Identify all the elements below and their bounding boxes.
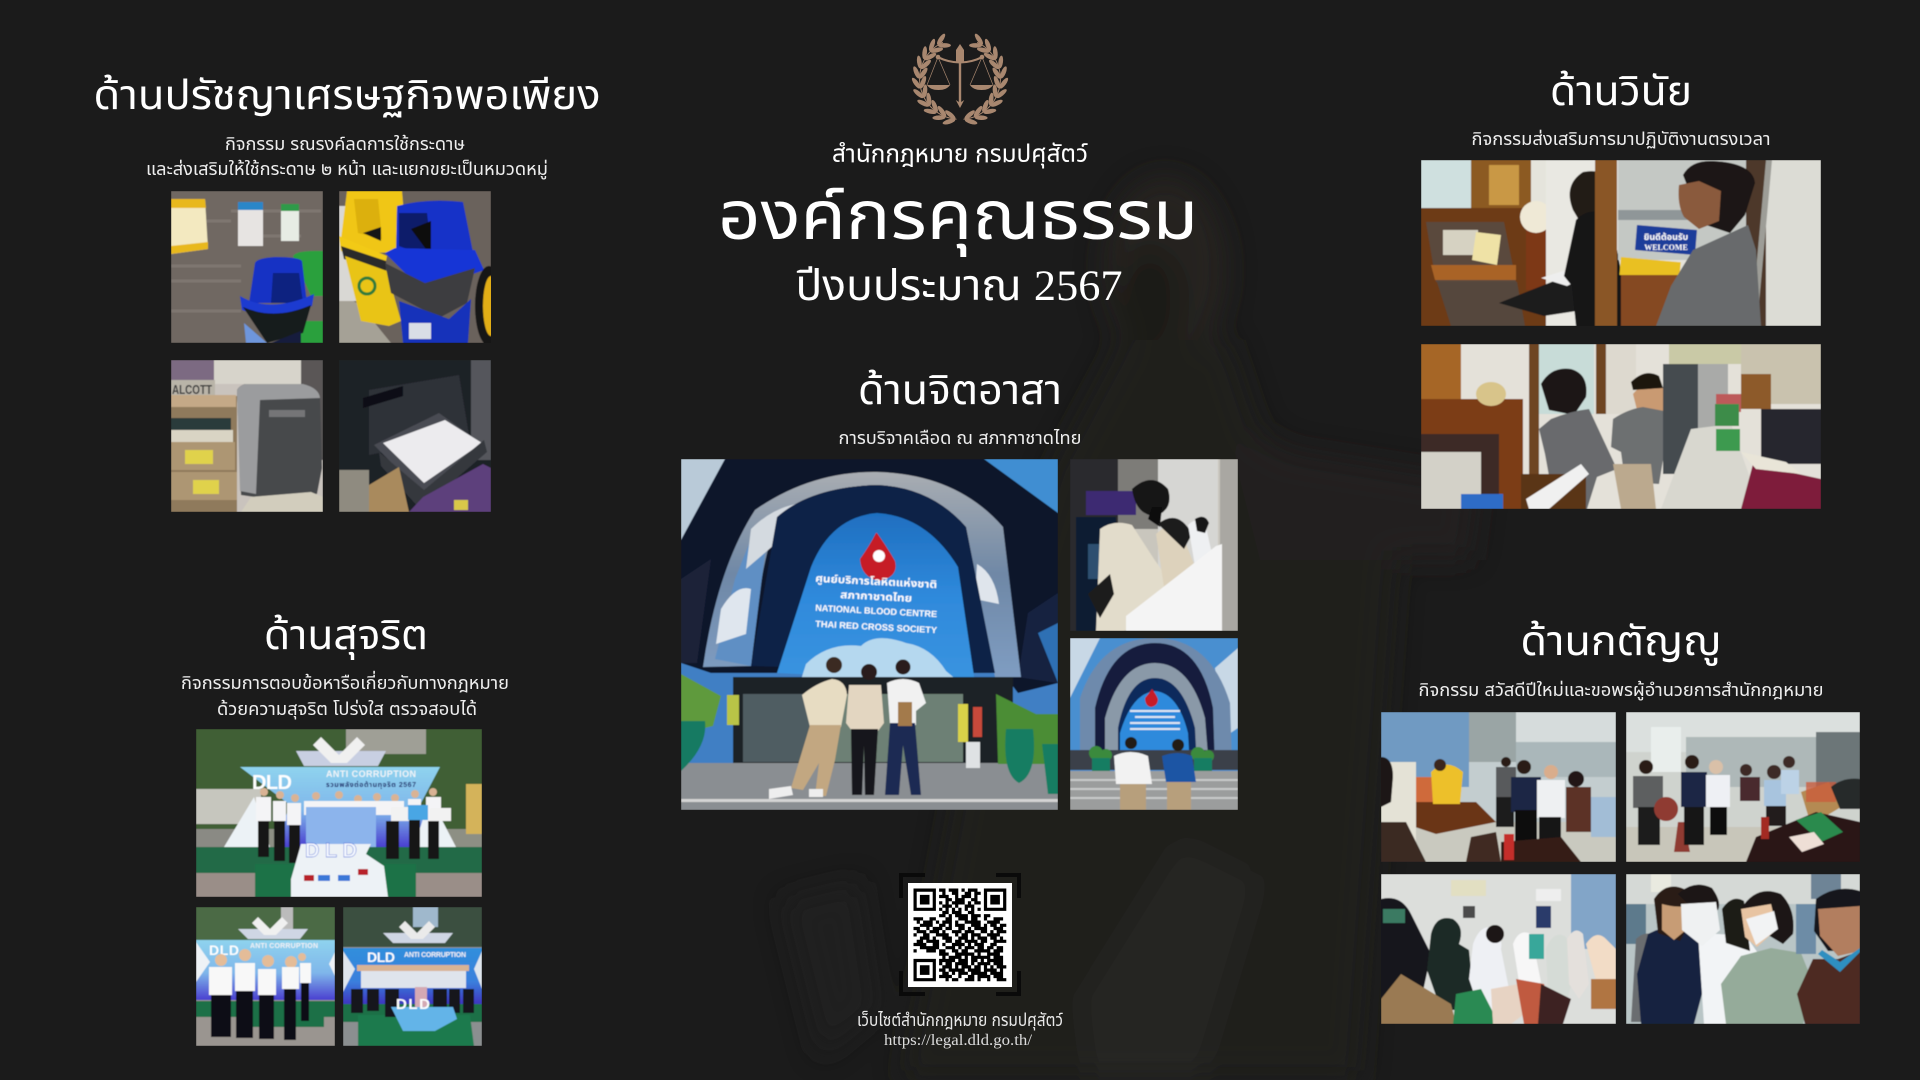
website url: https://legal.dld.go.th/ — [884, 1032, 1033, 1049]
photo: printer paper tray — [339, 360, 491, 512]
photo: staff close up — [1626, 874, 1860, 1024]
heading: gratitude: ด้านกตัญญู — [1520, 618, 1722, 666]
photo: anti corruption group: DLD — [305, 840, 357, 862]
QR corner brackets — [901, 875, 1019, 994]
photo: blood centre group — [1070, 638, 1238, 810]
photo: executives with crossed arms — [196, 907, 335, 1046]
photo: group on blue backdrop: ANTI CORRUPTION — [404, 952, 466, 959]
photo: blue recycling bin on stone wall — [171, 191, 323, 343]
photo: signing donation forms — [1070, 459, 1238, 631]
subheading: blood donation: การบริจาคเลือด ณ สภากาชาดไทย — [838, 428, 1082, 448]
heading: sufficiency economy: ด้านปรัชญาเศรษฐกิจพอเพียง — [94, 72, 600, 118]
building signage — [815, 572, 938, 635]
photo: anti corruption group: DLD — [252, 772, 292, 794]
photo: national blood centre — [681, 459, 1058, 810]
heading: volunteer: ด้านจิตอาสา — [858, 367, 1062, 413]
header subtitle: สำนักกฎหมาย กรมปศุสัตว์ — [832, 140, 1088, 169]
heading: discipline: ด้านวินัย — [1550, 68, 1692, 114]
photo: staff gathered in office — [1381, 874, 1616, 1024]
background statue of lady justice — [780, 175, 1480, 1080]
people — [769, 657, 926, 799]
description: honesty: ด้วยความสุจริต โปร่งใส ตรวจสอบได้ — [217, 699, 477, 720]
wreath left branch — [910, 32, 958, 128]
fiscal year line: ปีงบประมาณ 2567 — [796, 262, 1122, 310]
description: gratitude: กิจกรรม สวัสดีปีใหม่และขอพรผู้อำนวยการสำนักกฎหมาย — [1418, 680, 1824, 702]
website label: เว็บไซต์สำนักกฎหมาย กรมปศุสัตว์ — [857, 1010, 1063, 1031]
description: sufficiency economy: กิจกรรม รณรงค์ลดการใช้กระดาษ — [225, 134, 465, 154]
photo: yellow and blue bins — [339, 191, 491, 343]
photo: staff signing in: ยินดีต้อนรับ — [1644, 232, 1689, 242]
description: honesty — [181, 670, 509, 720]
photo: anti corruption group: รวมพลังต่อต้านทุจริต 2567 — [326, 781, 416, 790]
photo: group on blue backdrop: DLD — [396, 996, 430, 1013]
building signage: THAI RED CROSS SOCIETY — [815, 619, 937, 635]
building signage: NATIONAL BLOOD CENTRE — [815, 603, 937, 619]
photo: executives with crossed arms: ANTI CORRUPTION — [250, 943, 318, 950]
description: sufficiency economy: และส่งเสริมให้ใช้กระดาษ ๒ หน้า และแยกขยะเป็นหมวดหมู่ — [146, 159, 548, 181]
photo: executives with crossed arms: DLD — [209, 942, 239, 958]
photo: group on blue backdrop: DLD — [367, 949, 395, 965]
heading: honesty: ด้านสุจริต — [264, 612, 428, 660]
photo: anti corruption group — [196, 729, 482, 897]
photo: staff signing in — [1421, 160, 1821, 326]
photo: shredder and storage cart: ALCOTT — [172, 382, 212, 397]
main title: องค์กรคุณธรรม — [718, 178, 1198, 257]
photo: anti corruption group: ANTI CORRUPTION — [326, 769, 416, 779]
photo: group on blue backdrop — [343, 907, 482, 1046]
description: honesty: กิจกรรมการตอบข้อหารือเกี่ยวกับทางกฎหมาย — [181, 670, 509, 693]
building signage: ศูนย์บริการโลหิตแห่งชาติ — [815, 572, 938, 591]
photo: staff signing at cabinet — [1421, 344, 1821, 509]
building signage: สภากาชาดไทย — [840, 589, 912, 605]
emblem: scales and wreath — [910, 32, 1010, 128]
wreath right branch — [962, 32, 1010, 128]
photo: staff with hands pressed — [1626, 712, 1860, 862]
photo: staff signing in: WELCOME — [1644, 243, 1688, 252]
photo: shredder and storage cart — [171, 360, 323, 512]
description: sufficiency economy — [146, 134, 548, 181]
description: discipline: กิจกรรมส่งเสริมการมาปฏิบัติงานตรงเวลา — [1472, 129, 1770, 149]
QR code with corner brackets — [901, 875, 1019, 994]
photo: new year greeting at desk — [1381, 712, 1616, 862]
